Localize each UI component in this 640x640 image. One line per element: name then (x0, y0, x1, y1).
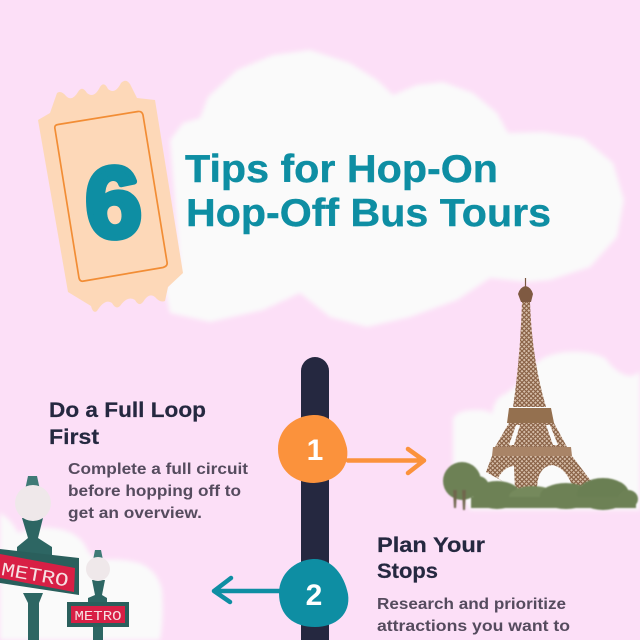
Eiffel Tower illustration (486, 278, 591, 492)
step 2 description: Research and prioritize (377, 596, 566, 613)
large metro lamp and sign (0, 476, 79, 640)
title: Tips for Hop-On (185, 148, 498, 191)
step 2 heading: Stops (377, 559, 438, 583)
large metro lamp and sign: METRO (0, 559, 70, 593)
step 1 badge (278, 415, 347, 483)
step 1 description: get an overview. (68, 505, 202, 522)
small metro lamp and sign (67, 550, 129, 640)
tower top cap (518, 286, 533, 302)
small metro lamp and sign: METRO (74, 609, 122, 625)
cloud: behind metro signs (0, 513, 163, 640)
arrow: step 1 to right (348, 449, 424, 473)
step 2 heading (377, 533, 486, 583)
step 1 heading (49, 398, 206, 449)
step 2 description (377, 596, 570, 635)
tower legs (486, 456, 591, 492)
arrow: step 2 to left (214, 578, 279, 602)
step 2 badge: 2 (306, 579, 322, 612)
tower first platform (507, 408, 554, 423)
step 2 heading: Plan Your (377, 533, 486, 557)
ticket illustration (38, 81, 183, 312)
title (185, 148, 551, 235)
step 1 description: Complete a full circuit (68, 461, 249, 478)
trees (443, 462, 638, 510)
tower middle section (495, 423, 567, 447)
cloud: title background (165, 50, 624, 327)
step 1 description (68, 461, 249, 522)
cloud: behind Eiffel Tower (453, 352, 640, 510)
title: Hop-Off Bus Tours (186, 192, 551, 235)
step 1 description: before hopping off to (68, 483, 241, 500)
step 2 description: attractions you want to (377, 618, 570, 635)
step 1 heading: Do a Full Loop (49, 398, 206, 422)
tower upper shaft (513, 302, 546, 407)
step 1 badge: 1 (307, 434, 323, 467)
number 6: 6 (82, 145, 145, 261)
step 1 heading: First (49, 425, 99, 449)
tower second platform (492, 447, 572, 456)
timeline bar (301, 357, 329, 640)
step 2 badge (279, 559, 348, 627)
tower arches (498, 465, 572, 492)
ticket inner border (55, 111, 167, 281)
